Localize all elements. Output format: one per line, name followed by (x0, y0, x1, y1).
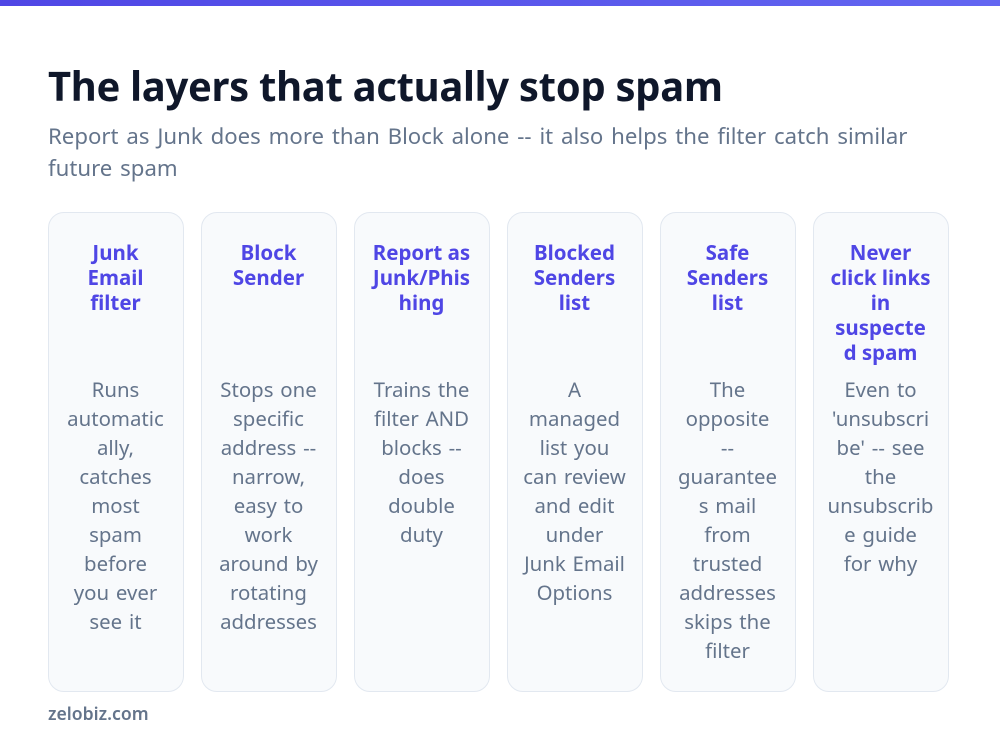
panel: Never click links in suspected spam: Even to (844, 375, 917, 403)
panel: Safe Senders list: The (710, 375, 745, 403)
panel: Safe Senders list (660, 212, 796, 692)
panel: Blocked Senders list: list you (540, 433, 609, 461)
panel: Report as Junk/Phishing: double (388, 491, 455, 519)
panel: Report as Junk/Phishing: hing (399, 289, 444, 317)
panel: Junk Email filter: ally, (97, 433, 134, 461)
panel: Block Sender: addresses (220, 607, 317, 635)
panel: Safe Senders list: trusted (693, 549, 762, 577)
panel: Report as Junk/Phishing: Junk/Phis (373, 264, 470, 292)
panel: Block Sender: rotating (230, 578, 307, 606)
title: The layers that actually stop spam (48, 58, 723, 113)
panel: Blocked Senders list: A (568, 375, 581, 403)
panel: Junk Email filter: see it (89, 607, 142, 635)
panel: Blocked Senders list: under (546, 520, 603, 548)
panel: Never click links in suspected spam: 'unsubscri (832, 404, 929, 432)
panel: Never click links in suspected spam: for why (844, 549, 917, 577)
panel: Block Sender: Block (241, 239, 296, 267)
panel: Safe Senders list: addresses (679, 578, 776, 606)
panel: Safe Senders list: guarantee (678, 462, 777, 490)
panel: Blocked Senders list: managed (529, 404, 620, 432)
subtitle (48, 120, 908, 183)
panel: Junk Email filter: Runs (92, 375, 139, 403)
panel: Safe Senders list: Senders (687, 264, 768, 292)
panel: Junk Email filter: before (84, 549, 147, 577)
panel: Never click links in suspected spam: unsubscrib (828, 491, 933, 519)
panel: Junk Email filter (48, 212, 184, 692)
panel: Block Sender: Stops one (220, 375, 317, 403)
panel: Report as Junk/Phishing: Trains the (374, 375, 469, 403)
panel: Safe Senders list: Safe (706, 239, 749, 267)
panel: Report as Junk/Phishing (354, 212, 490, 692)
panel: Never click links in suspected spam: suspecte (835, 314, 926, 342)
panel: Safe Senders list: s mail (699, 491, 756, 519)
panel: Junk Email filter: automatic (67, 404, 164, 432)
panel: Junk Email filter: most (91, 491, 140, 519)
panel: Blocked Senders list: list (559, 289, 590, 317)
panel: Never click links in suspected spam: in (871, 289, 890, 317)
panel: Blocked Senders list: Options (537, 578, 612, 606)
subtitle: future spam (48, 152, 178, 183)
panel: Never click links in suspected spam: d spam (844, 339, 917, 367)
panel: Junk Email filter: Email (88, 264, 144, 292)
panel: Junk Email filter: filter (90, 289, 141, 317)
panel: Never click links in suspected spam: be' -- see (837, 433, 924, 461)
panel: Blocked Senders list (507, 212, 643, 692)
panel: Block Sender: address -- (221, 433, 316, 461)
panel: Block Sender: specific (233, 404, 304, 432)
panel: Blocked Senders list: Blocked (534, 239, 615, 267)
panel: Block Sender (201, 212, 337, 692)
panel: Blocked Senders list: Junk Email (524, 549, 625, 577)
panel: Report as Junk/Phishing: duty (400, 520, 443, 548)
panel: Blocked Senders list: and edit (534, 491, 615, 519)
panel: Block Sender: Sender (233, 264, 304, 292)
panel: Safe Senders list: from (704, 520, 751, 548)
panel: Never click links in suspected spam: click links (830, 264, 930, 292)
panel: Never click links in suspected spam: Never (850, 239, 911, 267)
panel: Junk Email filter: catches (79, 462, 152, 490)
top accent bar (0, 0, 1000, 6)
panel: Blocked Senders list: Senders (534, 264, 615, 292)
panel: Junk Email filter: spam (89, 520, 142, 548)
panel: Safe Senders list: list (712, 289, 743, 317)
panel: Report as Junk/Phishing: does (398, 462, 445, 490)
panel: Report as Junk/Phishing: filter AND (374, 404, 469, 432)
footer brand: zelobiz.com (48, 702, 149, 726)
panel: Safe Senders list: opposite (686, 404, 769, 432)
panel: Never click links in suspected spam: the (865, 462, 896, 490)
panel: Block Sender: narrow, (232, 462, 305, 490)
panel: Report as Junk/Phishing: Report as (373, 239, 470, 267)
panel: Safe Senders list: filter (705, 636, 750, 664)
panel: Report as Junk/Phishing: blocks -- (381, 433, 462, 461)
panel: Never click links in suspected spam: e guide (844, 520, 917, 548)
panel: Block Sender: easy to (234, 491, 303, 519)
panel: Blocked Senders list: can review (523, 462, 626, 490)
panel: Block Sender: work (245, 520, 292, 548)
panel: Never click links in suspected spam (813, 212, 949, 692)
panel: Safe Senders list: -- (721, 433, 734, 461)
panel: Junk Email filter: Junk (92, 239, 139, 267)
subtitle: Report as Junk does more than Block alone -- it also helps the filter catch similar (48, 120, 907, 151)
panel: Safe Senders list: skips the (684, 607, 771, 635)
panel: Junk Email filter: you ever (74, 578, 157, 606)
panel: Block Sender: around by (219, 549, 318, 577)
